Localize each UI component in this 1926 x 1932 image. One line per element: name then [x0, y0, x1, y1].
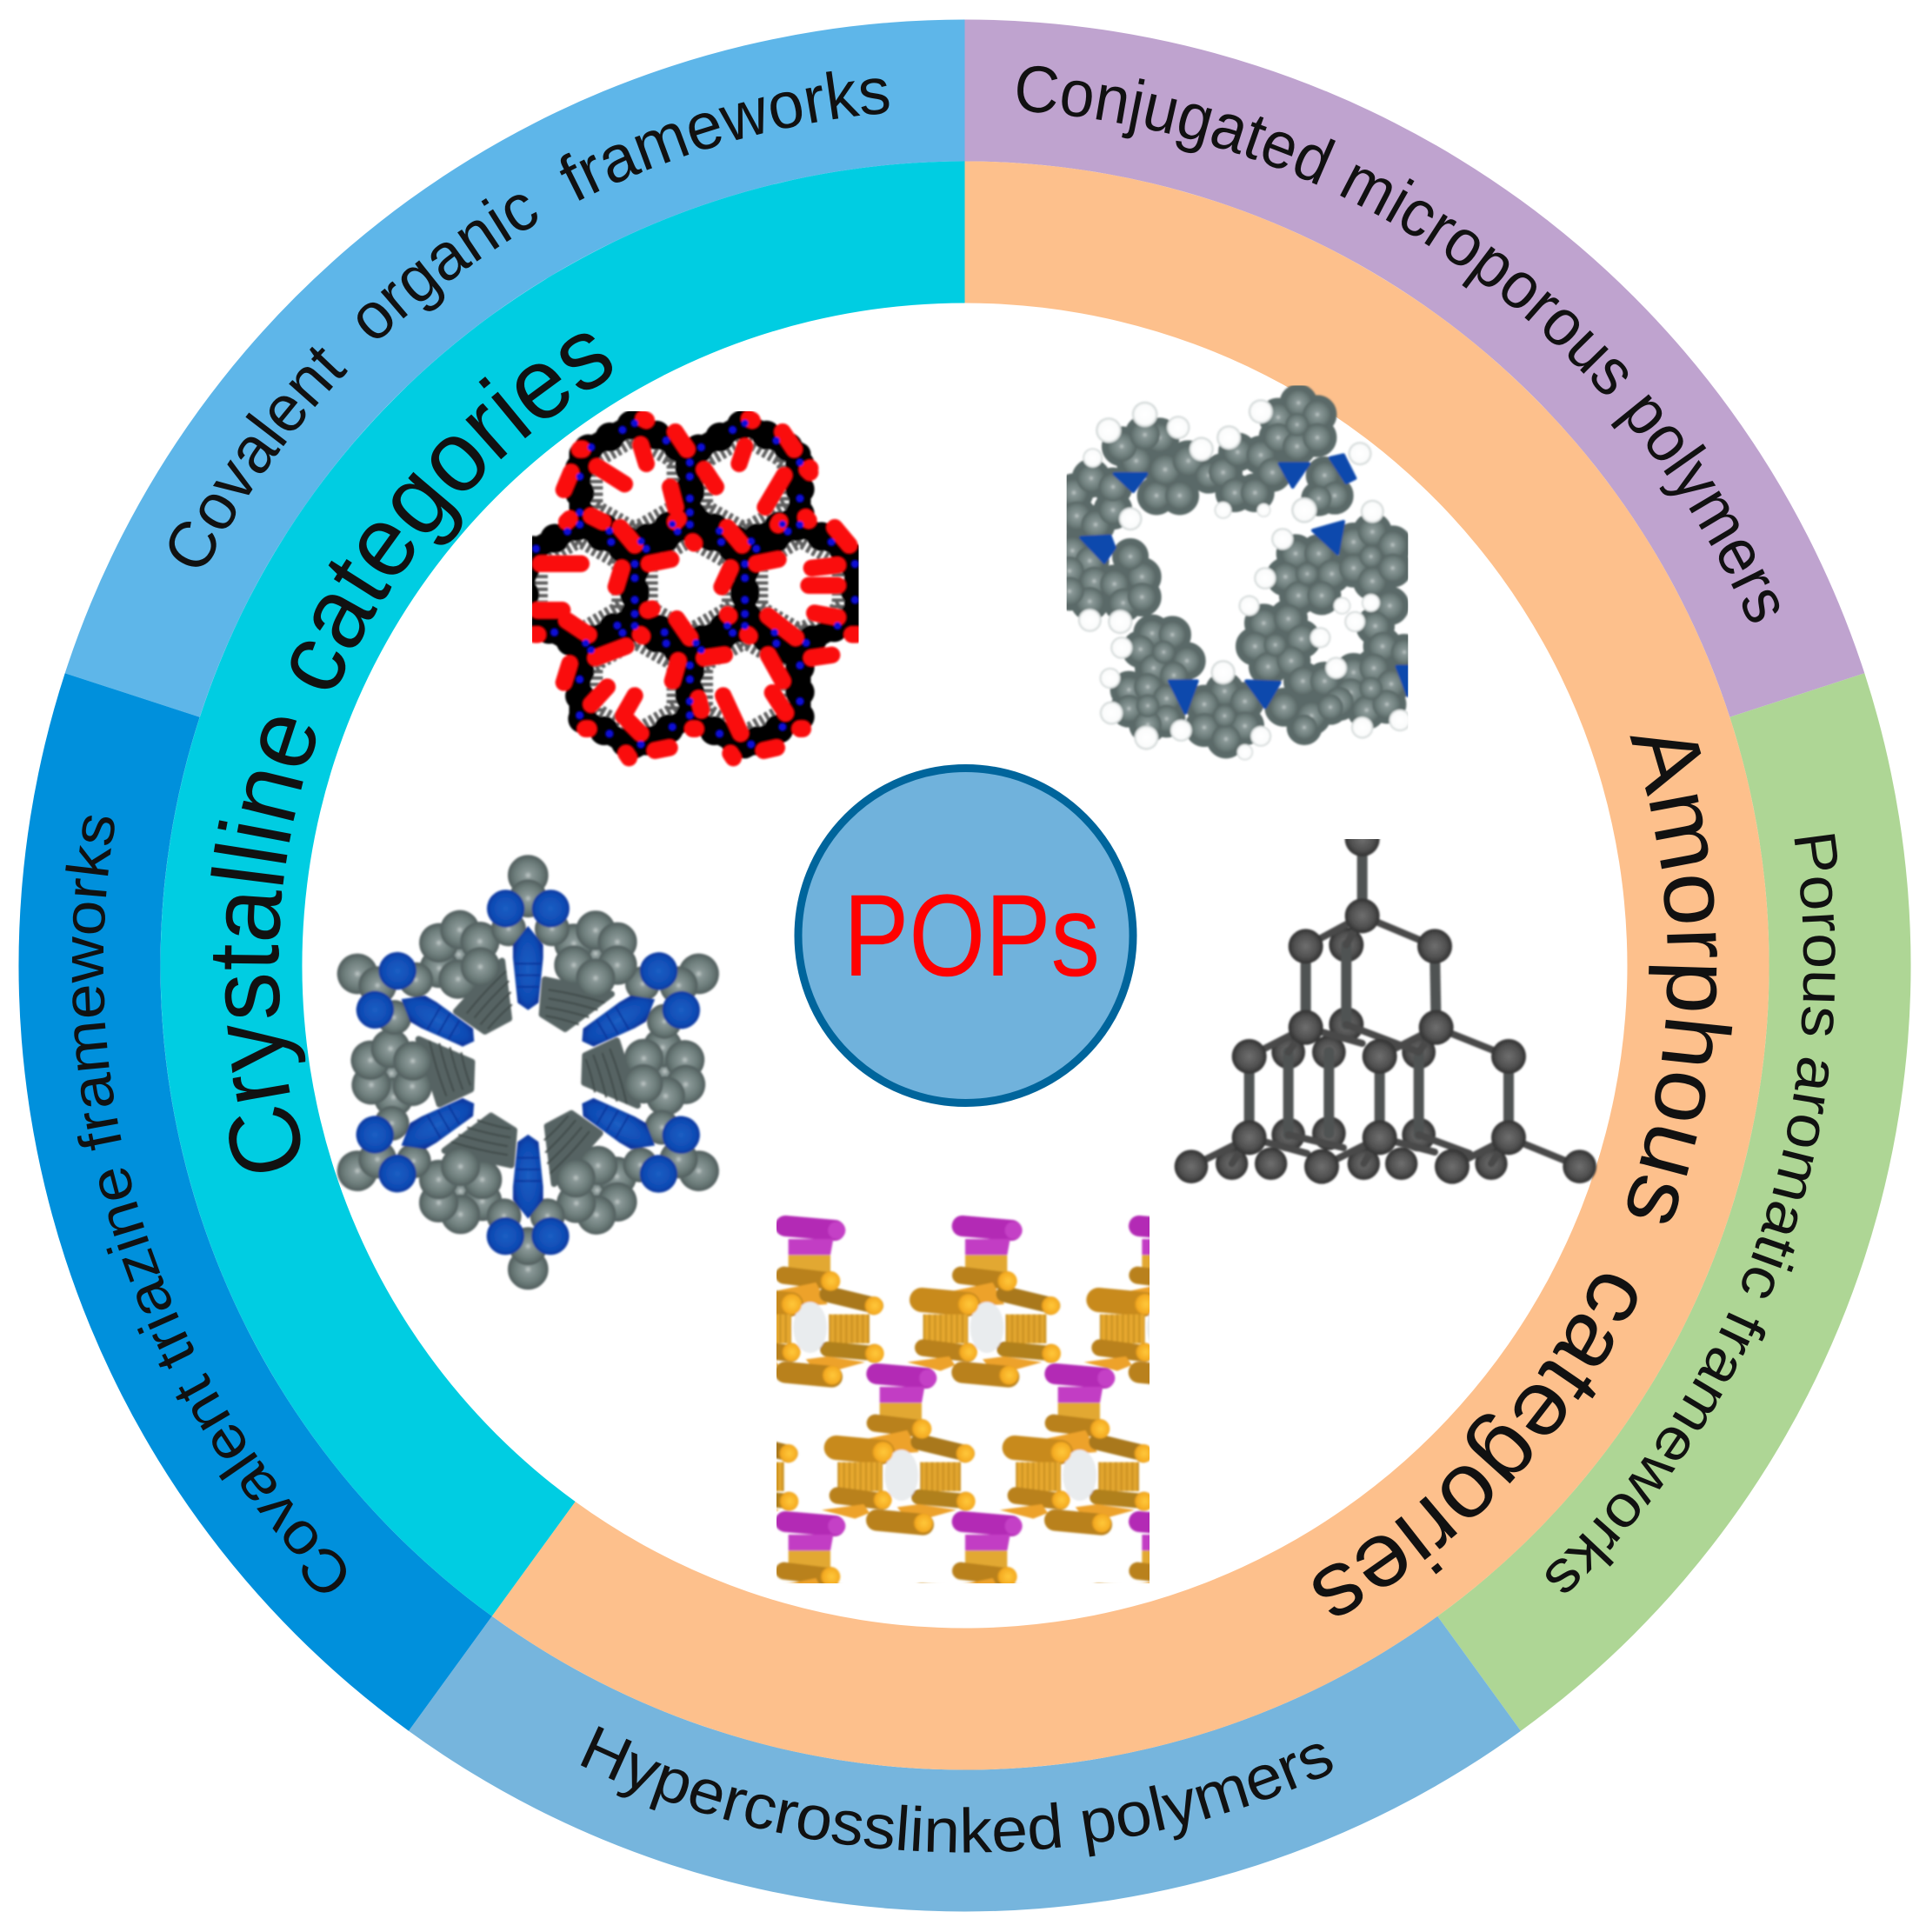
segment: covalent triazine frameworks	[18, 673, 492, 1731]
label: Conjugated microporous polymers: Conjugated microporous polymers	[1017, 66, 1779, 623]
label: Hypercrosslinked polymers: Hypercrosslinked polymers	[581, 1726, 1333, 1857]
center circle: POPs	[798, 769, 1133, 1103]
label: Porous aromatic frameworks: Porous aromatic frameworks	[1546, 834, 1837, 1593]
label: Covalent organic frameworks: Covalent organic frameworks	[169, 71, 889, 567]
segment: crystalline categories	[161, 162, 965, 1616]
molecule: red and black COF honeycomb	[524, 419, 856, 758]
molecule: gray, white and blue CMP space-filling model	[1055, 389, 1417, 760]
label: Covalent triazine frameworks: Covalent triazine frameworks	[65, 816, 346, 1593]
molecule: gray and blue CTF hexagon	[287, 856, 770, 1289]
center circle: POPs: POPs	[843, 871, 1100, 1001]
segment: hypercrosslinked polymers	[409, 1616, 1521, 1911]
segment: amorphous categories	[492, 161, 1769, 1769]
label: Amorphous categories: Amorphous categories	[1313, 736, 1732, 1616]
segment: conjugated microporous polymers	[965, 19, 1864, 717]
segment: porous aromatic frameworks	[1437, 673, 1911, 1731]
segment: covalent organic frameworks	[65, 19, 965, 717]
molecule: dark ball-and-stick lattice	[1175, 822, 1596, 1184]
label: Crystalline categories: Crystalline categories	[210, 334, 612, 1172]
middle ring: categories	[161, 161, 1769, 1769]
molecule: orange and magenta layered framework	[776, 1214, 1150, 1583]
